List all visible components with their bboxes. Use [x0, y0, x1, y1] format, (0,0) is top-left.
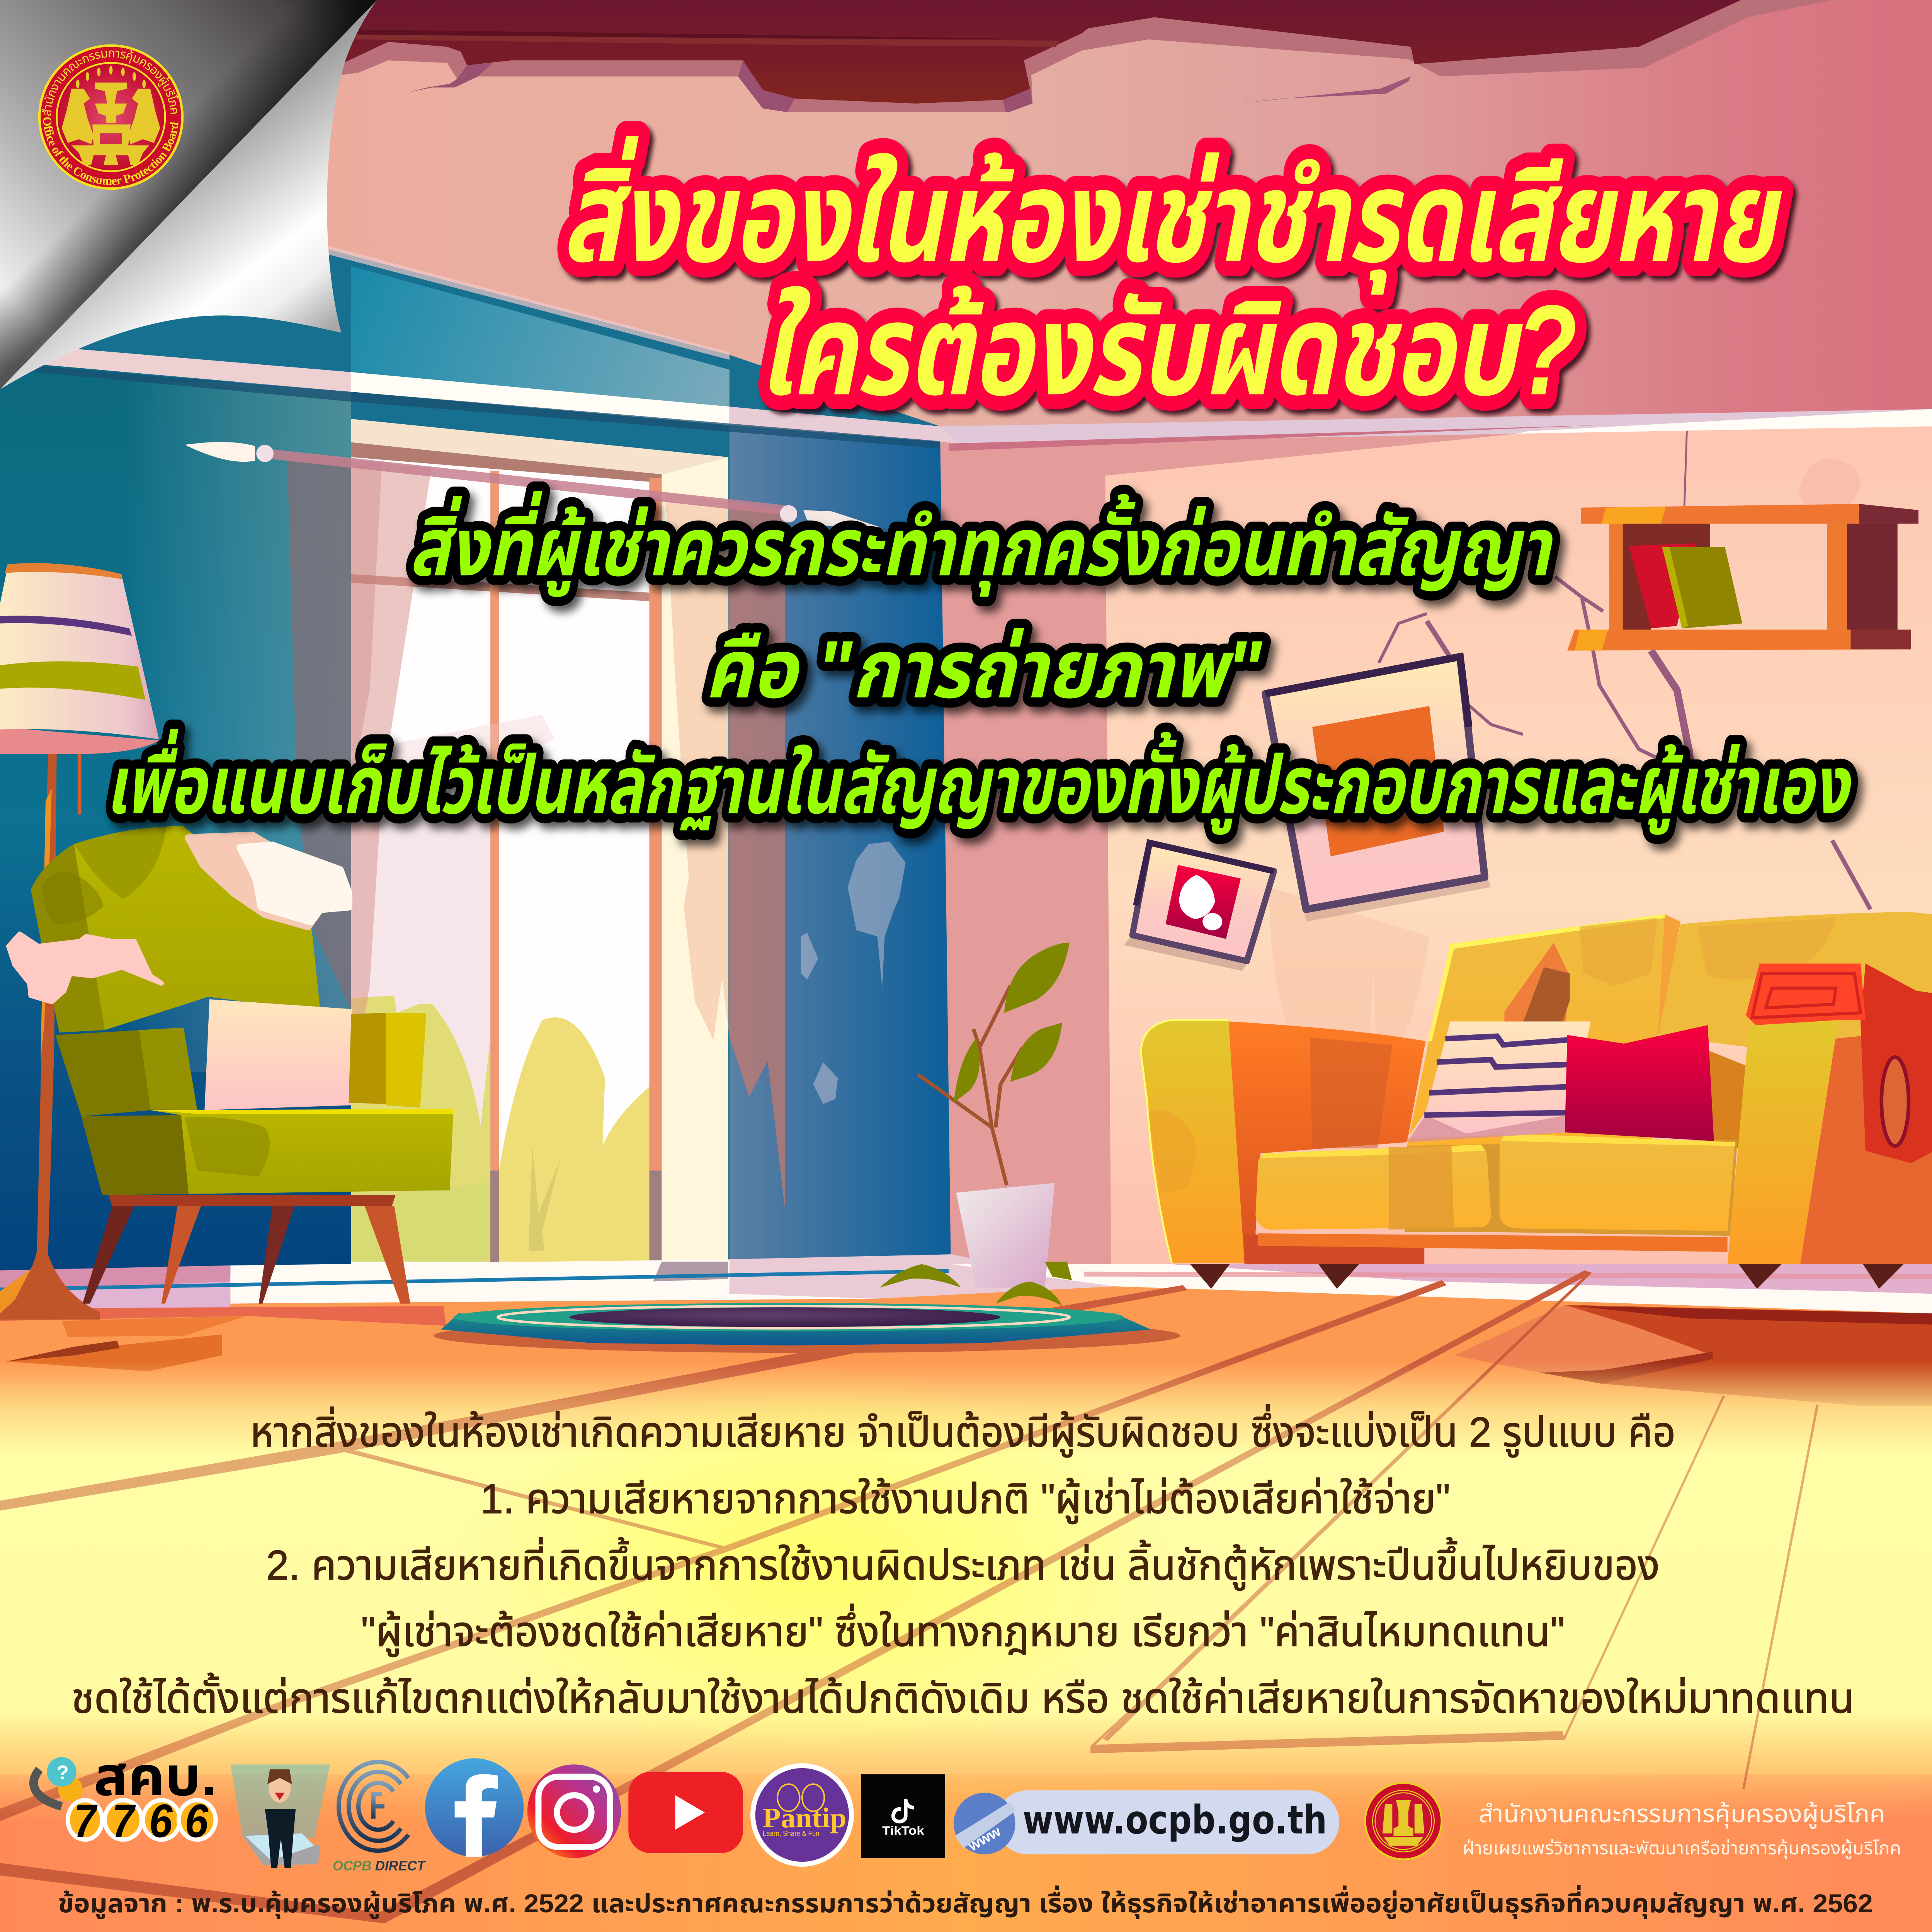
- chair lower: [81, 1115, 189, 1195]
- website text: www.ocpb.go.th: [1023, 1797, 1327, 1843]
- pantip icon: Pantip: [763, 1802, 847, 1833]
- pantip icon: [750, 1763, 854, 1867]
- sofa orange front: [1228, 1021, 1425, 1264]
- hotline number: 6: [149, 1794, 173, 1847]
- pantip icon: Learn, Share & Fun: [763, 1830, 820, 1838]
- table: [92, 124, 131, 146]
- hotline number: 6: [185, 1794, 209, 1847]
- globe: [954, 1793, 1015, 1854]
- baseboard: [0, 1254, 1932, 1313]
- shelf left support: [1623, 524, 1710, 629]
- curtain rod: [265, 449, 785, 515]
- plant pot: [956, 1183, 1055, 1287]
- sofa left back: [1407, 914, 1665, 1158]
- chair stuffing white: [240, 845, 349, 922]
- facebook icon: [425, 1758, 524, 1857]
- title: ใครต้องรับผิดชอบ?: [759, 279, 1577, 422]
- website pill: www: [965, 1823, 1004, 1855]
- wall stains: [848, 842, 906, 988]
- window glass: [351, 457, 649, 1264]
- hotline name: สคบ.: [94, 1746, 217, 1807]
- left blue wall: [0, 160, 951, 1275]
- large picture: [1263, 657, 1491, 922]
- small picture: [1124, 843, 1274, 971]
- red pillow: [1565, 1025, 1714, 1141]
- window: [351, 419, 728, 1264]
- page curl: [0, 0, 377, 389]
- tiktok icon: TikTok: [882, 1823, 924, 1837]
- bottom seal: [1365, 1783, 1442, 1859]
- hotline number: 7: [74, 1794, 98, 1847]
- floor: [0, 1281, 1932, 1932]
- lamp shade: [0, 568, 159, 739]
- hotline number: 7: [112, 1794, 136, 1847]
- lamp cord: [78, 735, 81, 815]
- body text: ชดใช้ได้ตั้งแต่การแก้ไขตกแต่งให้กลับมาใช้งานได้ปกติดังเดิม หรือ ชดใช้ค่าเสียหายในการจัดหาของใหม่มาทดแทน: [71, 1673, 1854, 1721]
- seat cushion left: [1255, 1145, 1491, 1230]
- trees outside window: [351, 996, 649, 1262]
- phone icon: [34, 1769, 61, 1806]
- striped pillow: [1407, 1021, 1591, 1142]
- shelf top board: [1581, 504, 1859, 524]
- curl flap: [0, 0, 377, 389]
- sofa: [1141, 912, 1932, 1289]
- OCPB direct caption: OCPB DIRECT: [333, 1859, 426, 1874]
- floor cracks and dark patches: [0, 1305, 1932, 1406]
- agency name: [1463, 1800, 1901, 1859]
- potted plant: [880, 942, 1072, 1306]
- white molding: [0, 342, 1932, 451]
- hotline logo: ?: [57, 1762, 69, 1784]
- subtitle: สิ่งที่ผู้เช่าควรกระทำทุกครั้งก่อนทำสัญญา: [409, 490, 1553, 597]
- sofa feet: [1190, 1264, 1904, 1289]
- fallen leaves: [880, 1262, 1072, 1306]
- torn hole: [1504, 942, 1570, 1047]
- right curtain: [665, 493, 730, 1040]
- plant leaves: [954, 942, 1070, 1103]
- subtitle: [106, 490, 1851, 835]
- website pill: [954, 1790, 1339, 1855]
- flames: [76, 66, 146, 88]
- shelf: [1567, 504, 1918, 651]
- shelf bottom board: [1567, 629, 1911, 651]
- seat cushion right: [1500, 1134, 1735, 1231]
- agency name: สำนักงานคณะกรรมการคุ้มครองผู้บริโภค: [1479, 1800, 1885, 1829]
- chair stuffing arm: [9, 934, 162, 1002]
- OCPB direct mascot: [230, 1764, 330, 1868]
- seal English text: Office of the Consumer Protection Board: [40, 116, 181, 188]
- floor boards over light: [0, 1270, 1819, 1923]
- chat bubbles: [58, 1777, 83, 1801]
- body text: 2. ความเสียหายที่เกิดขึ้นจากการใช้งานผิดประเภท เช่น ลิ้นชักตู้หักเพราะปีนขึ้นไปหยิบของ: [266, 1537, 1660, 1591]
- left curtain: [287, 453, 351, 1010]
- body text: 1. ความเสียหายจากการใช้งานปกติ "ผู้เช่าไม่ต้องเสียค่าใช้จ่าย": [481, 1475, 1450, 1524]
- instagram icon: [527, 1764, 621, 1858]
- top seal: [39, 46, 182, 189]
- ceiling: [0, 0, 1932, 444]
- rod finials: [185, 442, 881, 527]
- tiktok icon: [861, 1774, 945, 1858]
- seat: [150, 1110, 453, 1194]
- shelf right support: [1827, 524, 1847, 629]
- red book: [1629, 543, 1696, 628]
- lamp: [0, 563, 159, 1320]
- cushion: [204, 999, 352, 1110]
- armchair: [9, 825, 453, 1304]
- curl shadow area: [0, 0, 377, 389]
- OCPB direct logo: [333, 1762, 426, 1874]
- chair back: [74, 825, 320, 1030]
- floor boards: [0, 1270, 1819, 1923]
- chair side: [31, 844, 105, 1032]
- olive book: [1662, 547, 1742, 628]
- chair legs: [83, 1206, 410, 1304]
- chair stuffing top: [189, 835, 323, 927]
- curtains: [185, 442, 906, 1209]
- lions: [61, 89, 94, 144]
- subtitle: คือ "การถ่ายภาพ": [705, 624, 1262, 715]
- urn: [95, 83, 127, 123]
- floor glow: [456, 1368, 1170, 1762]
- frame top: [351, 419, 728, 474]
- youtube icon: [628, 1772, 743, 1853]
- seal Thai text: สำนักงานคณะกรรมการคุ้มครองผู้บริโภค: [40, 46, 182, 117]
- agency name: ฝ่ายเผยแพร่วิชาการและพัฒนาเครือข่ายการคุ้มครองผู้บริโภค: [1463, 1838, 1901, 1859]
- body text: หากสิ่งของในห้องเช่าเกิดความเสียหาย จำเป็นต้องมีผู้รับผิดชอบ ซึ่งจะแบ่งเป็น 2 รูปแบบ คือ: [250, 1404, 1676, 1458]
- source note: ข้อมูลจาก : พ.ร.บ.คุ้มครองผู้บริโภค พ.ศ. 2522 และประกาศคณะกรรมการว่าด้วยสัญญา เรื่อง ให้ธุรกิจให้เช่าอาคารเพื่ออยู่อาศัยเป็นธุรกิจที่ควบคุมสัญญา พ.ศ. 2562: [58, 1885, 1873, 1919]
- blanket: [1746, 964, 1932, 1163]
- hotline logo: [34, 1746, 217, 1847]
- frame verticals: [490, 471, 499, 1264]
- window reveal: [662, 457, 728, 1262]
- title: [562, 134, 1783, 422]
- seal emblem: [61, 66, 160, 165]
- ceiling hole: [333, 0, 1833, 112]
- sofa right arm: [1728, 1020, 1838, 1264]
- chair frame: [109, 1195, 396, 1206]
- floor light overlay: [0, 1362, 1932, 1823]
- lamp shade underside: [0, 727, 159, 754]
- rug: [434, 1303, 1180, 1353]
- left arm block: [55, 1027, 197, 1116]
- base: [71, 145, 149, 165]
- sofa base: [1405, 1140, 1737, 1236]
- sofa left arm: [1141, 1020, 1245, 1263]
- plant stems: [918, 986, 1023, 1185]
- body text: "ผู้เช่าจะต้องชดใช้ค่าเสียหาย" ซึ่งในทางกฎหมาย เรียกว่า "ค่าสินไหมทดแทน": [361, 1604, 1565, 1657]
- right wall: [940, 419, 1932, 1294]
- right arm block: [349, 1013, 426, 1108]
- sofa right back: [1656, 912, 1932, 1047]
- sofa right side: [1800, 1020, 1932, 1264]
- body text: [71, 1404, 1854, 1721]
- hotline number: [68, 1794, 216, 1847]
- lamp pole: [0, 752, 100, 1320]
- wall cracks: [1379, 431, 1871, 909]
